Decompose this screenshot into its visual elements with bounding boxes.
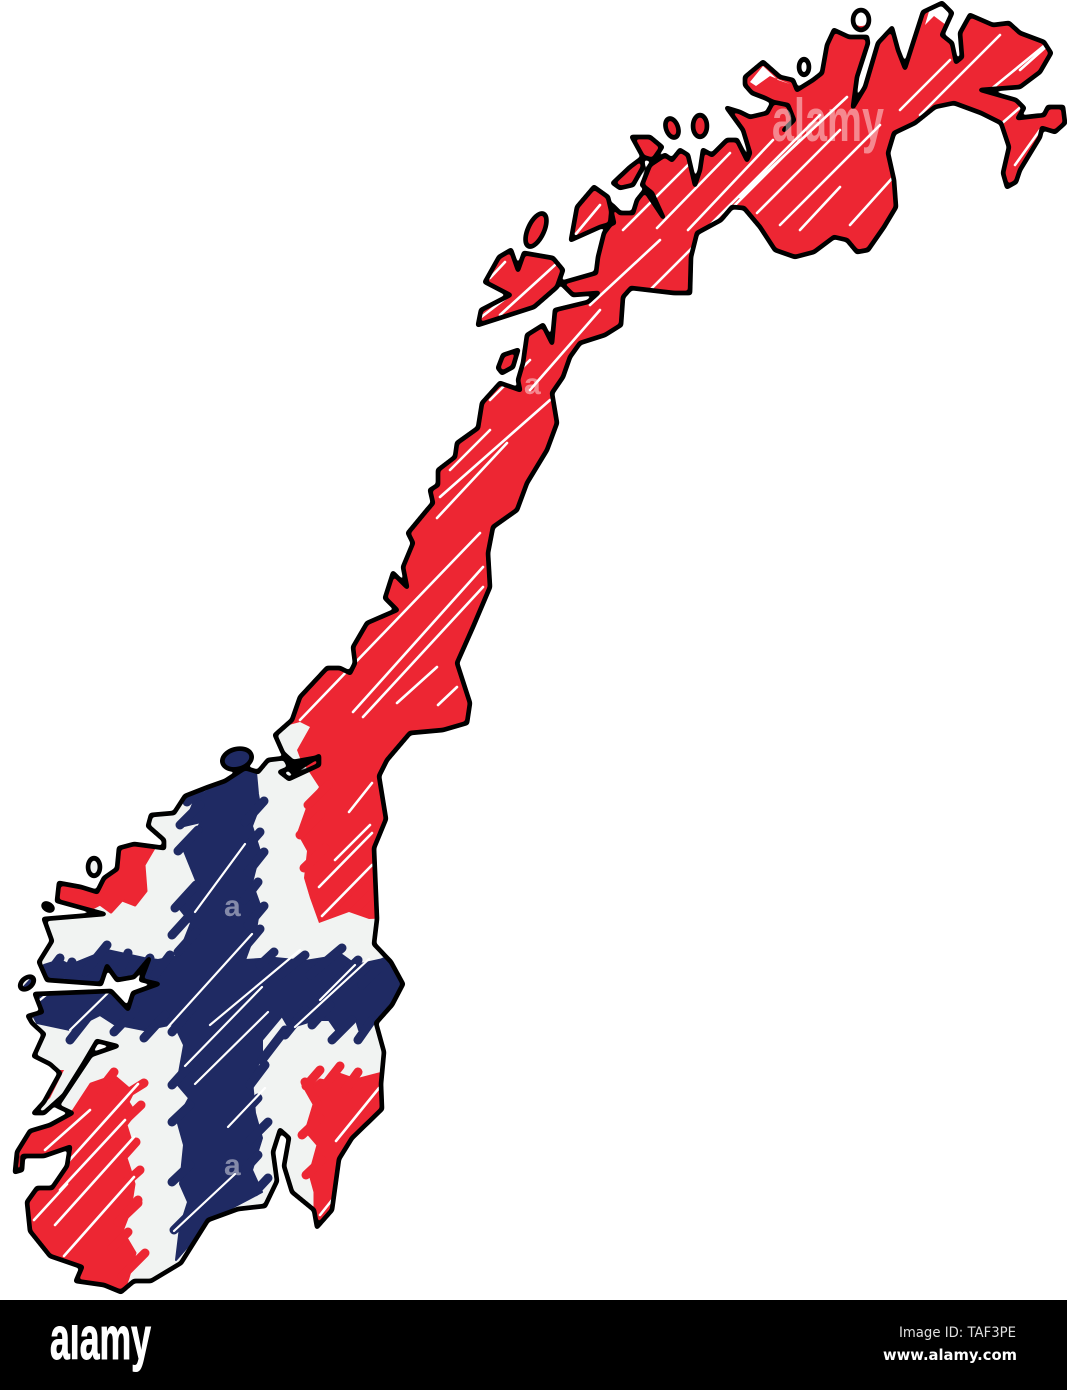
red corner: south-west [10, 1076, 135, 1300]
footer logo: alamy [50, 1305, 151, 1372]
red scribble edge of south-east quadrant [302, 1066, 358, 1175]
website: www.alamy.com [883, 1346, 1017, 1364]
red scribble edge of south-west quadrant [100, 1072, 145, 1276]
scribble highlights on navy [40, 844, 369, 1231]
image id: Image ID: TAF3PE [899, 1325, 1016, 1341]
red corner: south-east [306, 1072, 380, 1220]
watermark: alamy [772, 87, 884, 154]
red field [290, 12, 1062, 923]
navy cross [20, 745, 410, 1260]
red corner: north-west [60, 846, 155, 914]
white interiors of small northern shapes [750, 0, 954, 86]
white cross band [22, 722, 389, 1284]
watermark: a [524, 368, 541, 401]
red scribble edge of north-east quadrant [296, 788, 318, 894]
watermark: a [224, 1149, 241, 1182]
watermark: a [224, 890, 241, 923]
footer bar [0, 1300, 1067, 1390]
navy scribble edges [45, 785, 384, 1230]
watermark [224, 87, 884, 1182]
small red patch on west coast [47, 1070, 64, 1101]
